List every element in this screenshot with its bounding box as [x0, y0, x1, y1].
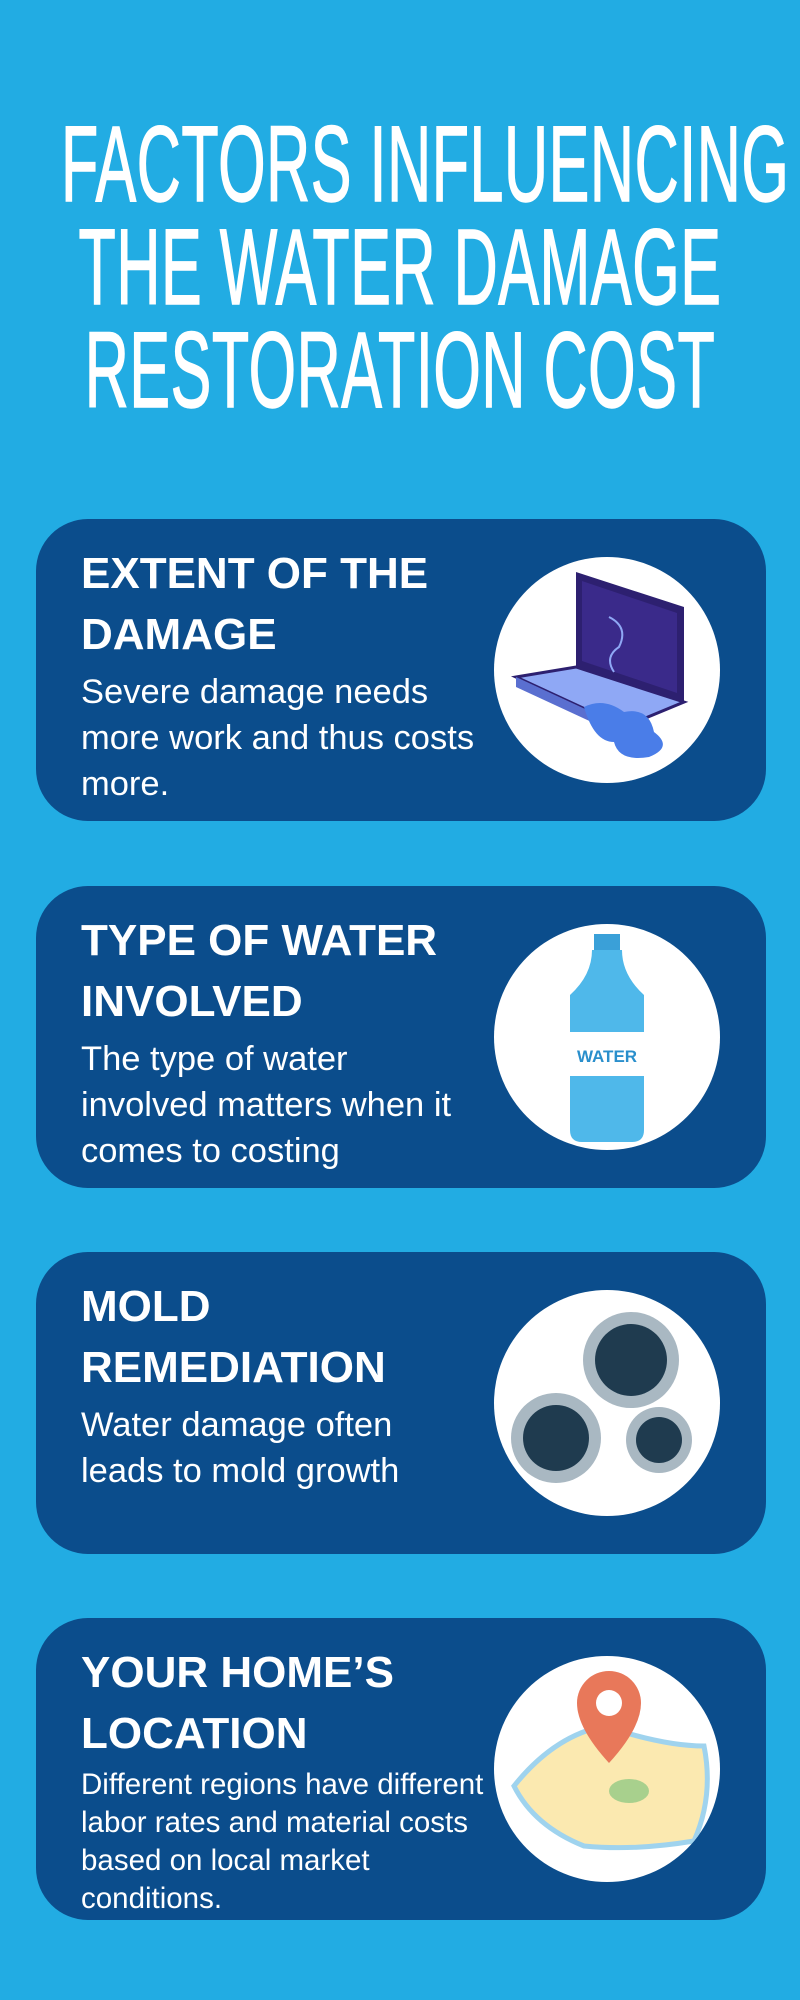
panel: extent of the damage: [36, 519, 766, 821]
icon: mold spots: [494, 1290, 720, 1516]
text: [81, 1406, 399, 1490]
heading: YOUR HOME’S: [81, 1648, 394, 1697]
panel: type of water: [36, 886, 766, 1188]
title: FACTORS INFLUENCING: [61, 103, 789, 224]
text: conditions.: [81, 1882, 222, 1915]
text: comes to costing: [81, 1132, 340, 1170]
text: Water damage often: [81, 1406, 392, 1444]
text: based on local market: [81, 1844, 370, 1877]
heading: TYPE OF WATER: [81, 916, 437, 965]
heading: [81, 1648, 394, 1758]
heading: INVOLVED: [81, 977, 303, 1026]
icon: water bottle: [494, 924, 720, 1150]
text: leads to mold growth: [81, 1452, 399, 1490]
text: labor rates and material costs: [81, 1806, 468, 1839]
heading: [81, 549, 428, 659]
heading: [81, 1282, 386, 1392]
heading: MOLD: [81, 1282, 211, 1331]
text: Severe damage needs: [81, 673, 428, 711]
text: [81, 673, 474, 803]
panel: home location: [36, 1618, 766, 1920]
heading: LOCATION: [81, 1709, 308, 1758]
heading: EXTENT OF THE: [81, 549, 428, 598]
icon: map pin: [494, 1656, 720, 1882]
text: involved matters when it: [81, 1086, 451, 1124]
heading: REMEDIATION: [81, 1343, 386, 1392]
text: more work and thus costs: [81, 719, 474, 757]
title: THE WATER DAMAGE: [79, 206, 721, 327]
text: Different regions have different: [81, 1768, 483, 1801]
panel: mold remediation: [36, 1252, 766, 1554]
title: RESTORATION COST: [85, 309, 715, 430]
icon: water bottle: WATER: [577, 1047, 637, 1066]
title: [61, 103, 789, 430]
heading: [81, 916, 437, 1026]
text: [81, 1040, 451, 1170]
heading: DAMAGE: [81, 610, 277, 659]
text: The type of water: [81, 1040, 348, 1078]
text: more.: [81, 765, 169, 803]
text: [81, 1768, 484, 1915]
icon: wet laptop: [494, 557, 720, 783]
